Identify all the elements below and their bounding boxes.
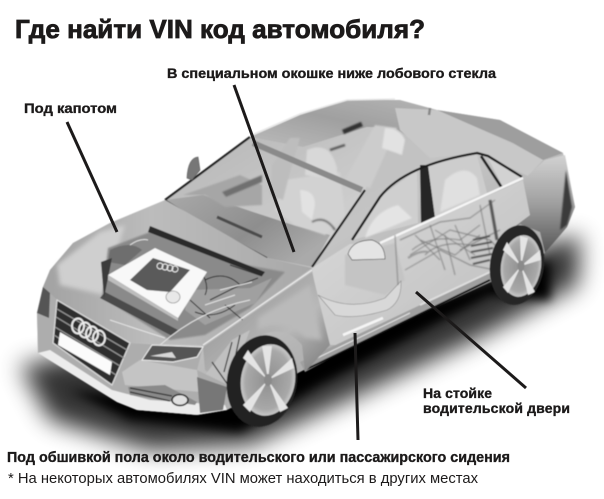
headlight	[142, 345, 203, 362]
suspension and mechanicals	[395, 200, 505, 285]
lower intake and fog lamp	[128, 385, 197, 406]
license plate	[58, 332, 112, 375]
front wheel	[220, 330, 304, 432]
car body	[37, 100, 575, 415]
hood reflection	[57, 225, 125, 295]
hood edge	[203, 270, 312, 345]
grille	[53, 300, 130, 385]
footnote: * На некоторых автомобилях VIN может находиться в других местах	[8, 471, 479, 487]
label: door pillar: водительской двери	[423, 400, 570, 416]
ground shadow	[20, 235, 580, 450]
window sill highlight	[380, 178, 523, 243]
pointer: windshield window	[234, 85, 294, 252]
fender highlight	[258, 285, 322, 340]
side sill	[300, 272, 495, 372]
label: windshield window: В специальном окошке ниже лобового стекла	[167, 66, 497, 81]
front side window	[352, 170, 418, 240]
door mirror	[348, 240, 385, 260]
antenna	[429, 108, 430, 115]
door transparent area	[312, 180, 530, 345]
B pillar	[420, 165, 435, 223]
audi rings	[72, 318, 105, 346]
label: floor trim: Под обшивкой пола около водительского или пассажирского сидения	[7, 450, 510, 466]
reservoir cap	[166, 291, 180, 303]
front fender	[203, 272, 330, 385]
visor strip	[253, 143, 362, 190]
rear side window	[428, 155, 487, 217]
hood	[43, 200, 312, 345]
windshield frame	[165, 137, 365, 267]
engine bay	[100, 226, 285, 345]
dashboard	[165, 195, 330, 267]
pointer: door pillar	[416, 292, 526, 388]
sill plate highlight	[343, 318, 383, 335]
quarter window	[488, 158, 522, 187]
front transparent suspension	[205, 330, 250, 388]
driver seat back	[345, 243, 405, 295]
rear wheel	[485, 222, 549, 308]
trunk lid	[437, 110, 563, 160]
label: under the hood: Под капотом	[24, 101, 117, 116]
front bumper	[37, 287, 228, 415]
windshield	[165, 127, 395, 267]
engine cover	[108, 248, 207, 318]
window frame	[352, 153, 522, 240]
contact shadow	[70, 260, 550, 432]
label: door pillar: На стойке	[423, 385, 492, 401]
far side mirror	[187, 157, 200, 180]
car illustration	[20, 99, 580, 450]
title: Где найти VIN код автомобиля?	[15, 14, 425, 44]
seats behind glass	[183, 124, 405, 235]
pointer: under the hood	[67, 122, 117, 232]
dash vent strip	[217, 217, 262, 237]
driver seat cushion	[318, 281, 401, 317]
engine cover insert	[130, 258, 190, 292]
rear quarter panel	[490, 155, 575, 253]
roof	[250, 100, 470, 150]
pointer: floor trim	[355, 333, 358, 440]
fender dark wedge	[197, 377, 227, 413]
